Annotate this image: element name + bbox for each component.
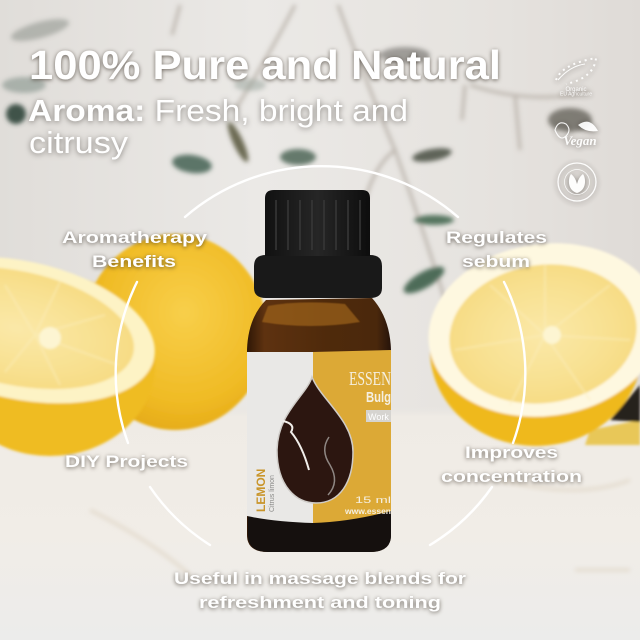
label: regulates sebum: Regulates bbox=[446, 228, 547, 247]
icon: vegan: Vegan bbox=[563, 133, 597, 148]
label: massage blends bbox=[174, 569, 466, 612]
lemon: left half bbox=[0, 257, 156, 458]
icon: EU organic leaf: EU Agriculture bbox=[560, 92, 592, 98]
product bottle bbox=[247, 190, 391, 552]
icon: vegan bbox=[555, 122, 598, 148]
label: massage blends: Useful in massage blends for bbox=[174, 569, 466, 588]
label: improves concentration: Improves bbox=[465, 443, 558, 462]
label: regulates sebum bbox=[446, 228, 547, 271]
blurred eucalyptus branches bbox=[2, 5, 592, 300]
benefit labels bbox=[62, 228, 582, 612]
glass highlights bbox=[262, 302, 360, 326]
label text: Citrus limon bbox=[269, 475, 276, 512]
aroma subtitle bbox=[28, 93, 408, 160]
icon: EU organic leaf bbox=[556, 58, 596, 98]
label text: www.essen bbox=[344, 507, 391, 516]
drop icon bbox=[277, 377, 353, 503]
white label bbox=[247, 352, 313, 523]
aroma subtitle: Aroma: Fresh, bright and bbox=[28, 93, 408, 128]
label text: Bulg bbox=[366, 389, 391, 406]
certification icons bbox=[555, 58, 598, 201]
label: aromatherapy benefits: Aromatherapy bbox=[62, 228, 208, 247]
label: aromatherapy benefits: Benefits bbox=[92, 252, 176, 271]
icon: no animal testing bbox=[558, 163, 596, 201]
cap ridges bbox=[276, 200, 360, 250]
icon: EU organic leaf: Organic bbox=[565, 87, 587, 93]
label: improves concentration bbox=[441, 443, 582, 486]
lemon: right half bbox=[428, 242, 640, 448]
label: DIY projects: DIY Projects bbox=[65, 452, 188, 471]
cap collar bbox=[254, 255, 382, 298]
cap top bbox=[265, 190, 370, 256]
bottle base bbox=[248, 510, 391, 552]
bottle glass bbox=[247, 298, 391, 552]
lemon: back whole lemon bbox=[83, 234, 267, 430]
label: regulates sebum: sebum bbox=[462, 252, 530, 271]
aroma subtitle: citrusy bbox=[29, 125, 129, 160]
circular arcs bbox=[116, 166, 525, 545]
label text: 15 ml bbox=[355, 495, 391, 505]
title: 100% Pure and Natural bbox=[29, 42, 501, 88]
gold label bbox=[313, 350, 391, 523]
label text: ESSEN bbox=[349, 368, 391, 390]
label: aromatherapy benefits bbox=[62, 228, 208, 271]
label: improves concentration: concentration bbox=[441, 467, 582, 486]
label text bbox=[254, 368, 391, 516]
label: massage blends: refreshment and toning bbox=[199, 593, 441, 612]
label text: LEMON bbox=[254, 469, 268, 512]
label text: Work bbox=[368, 412, 389, 422]
